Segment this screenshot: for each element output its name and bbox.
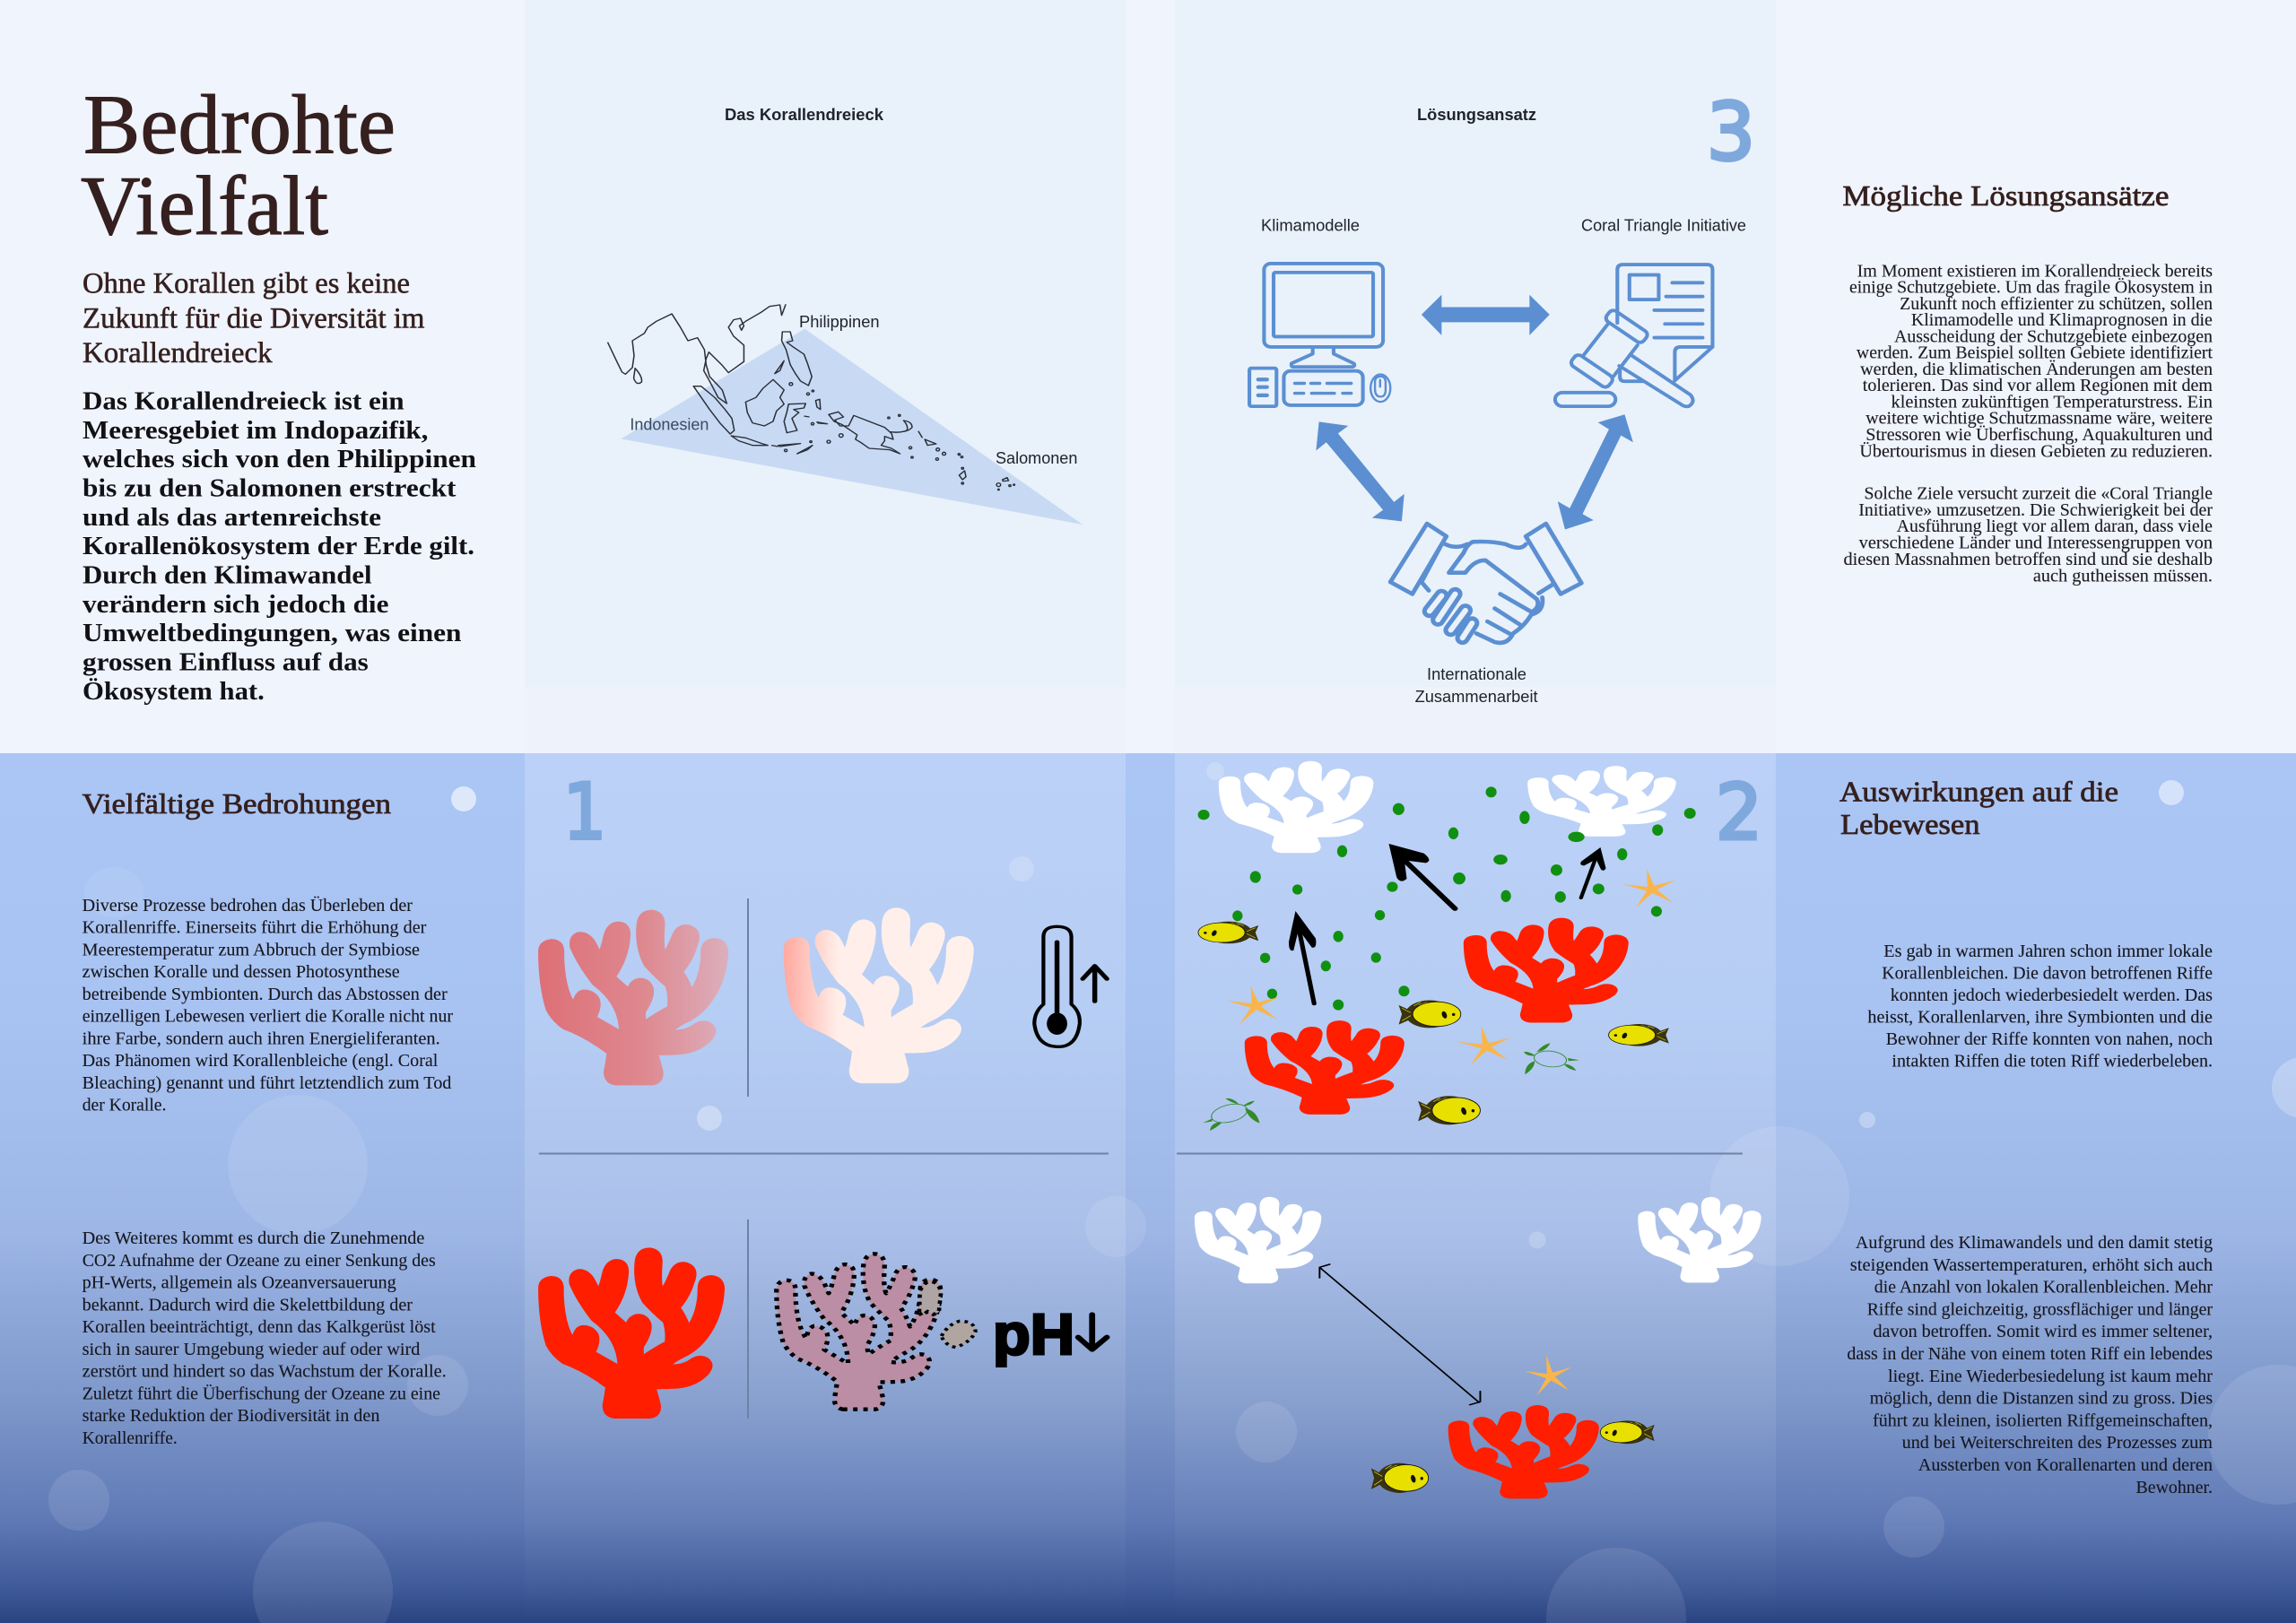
starfish [1525, 1355, 1572, 1396]
diagram: recolonisation with nearby reefs [1198, 762, 1696, 1131]
text: possible solutions: Klimamodelle und Klimaprognosen in die [1911, 311, 2213, 330]
text: threats: einzelligen Lebewesen verliert die Koralle nicht nur [83, 1007, 453, 1027]
label: pH: pH [993, 1302, 1074, 1367]
coral triangle map [608, 304, 1083, 525]
map labels: Indonesien [630, 414, 709, 433]
coral: bleached [786, 909, 971, 1081]
text: threats: Meerestemperatur zum Abbruch der Symbiose [83, 940, 420, 959]
text: threats: betreibende Symbionten. Durch das Abstossen der [83, 985, 448, 1004]
text: threats: pH-Werts, allgemein als Ozeanversauerung [83, 1273, 396, 1293]
turtle left [1203, 1098, 1260, 1131]
fish [1371, 1420, 1655, 1493]
panel: threats diagram background [525, 753, 1126, 1623]
coral: dissolved dotted [777, 1254, 941, 1410]
panel: map background [525, 0, 1126, 753]
arrow: upper coral to dead coral right [1580, 847, 1606, 898]
text: effects: die Anzahl von lokalen Korallenbleichen. Mehr [1874, 1278, 2213, 1298]
text: threats: ihre Farbe, sondern auch ihren Energieliferanten. [83, 1028, 440, 1048]
coral: dead white right [1639, 1198, 1760, 1281]
text: possible solutions: Ausführung liegt vor allem daran, dass viele [1897, 517, 2213, 536]
text: threats: CO2 Aufnahme der Ozeane zu einer Senkung des [83, 1251, 436, 1271]
panel: effects diagram background [1175, 753, 1776, 1623]
broken coral tip [919, 1281, 941, 1315]
coral: healthy faded [541, 912, 726, 1083]
coral: living red upper [1465, 919, 1626, 1021]
coral: living red lower [1247, 1021, 1402, 1114]
text: threats: zerstört und hindert so das Wachstum der Koralle. [83, 1362, 447, 1382]
diagram: ocean acidification [541, 1249, 1107, 1417]
map heading: Das Korallendreieck [725, 105, 884, 124]
title: Vielfalt [81, 160, 328, 253]
text: possible solutions: kleinsten zukünftigen Temperaturstress. Ein [1891, 393, 2213, 412]
text: threats: Diverse Prozesse bedrohen das Überleben der [83, 895, 413, 916]
text: threats: sich in saurer Umgebung wieder auf oder wird [83, 1340, 420, 1359]
text: possible solutions: werden, die klimatischen Änderungen am besten [1860, 360, 2213, 379]
heading: possible solutions: Mögliche Lösungsansätze [1842, 179, 2169, 212]
heading: effects: Lebewesen [1840, 808, 1980, 840]
coral: dead white left [1221, 762, 1371, 852]
text: effects: dass in der Nähe von einem toten Riff ein lebendes [1847, 1344, 2213, 1364]
arrow: lower coral to dead coral [1289, 911, 1316, 1003]
larvae dots [1198, 786, 1696, 1011]
intro text: bis zu den Salomonen erstreckt [83, 475, 457, 502]
text: possible solutions: Übertourismus in diesen Gebieten zu reduzieren. [1859, 442, 2213, 461]
solution diagram labels: Klimamodelle [1261, 216, 1360, 235]
text: threats: Korallenriffe. [83, 1428, 178, 1448]
title: Bedrohte [83, 79, 396, 172]
arrow: distance between reefs [1319, 1264, 1480, 1405]
text: threats: Korallenriffe. Einerseits führt die Erhöhung der [83, 918, 427, 938]
coral: living red [1450, 1406, 1597, 1497]
intro text: Das Korallendreieck ist ein [83, 387, 404, 416]
starfish [1226, 869, 1676, 1065]
subtitle: Zukunft für die Diversität im [83, 302, 425, 334]
text: effects: intakten Riffen die toten Riff wiederbeleben. [1892, 1051, 2213, 1071]
text: possible solutions: weitere wichtige Schutzmassname wäre, weitere [1866, 410, 2213, 429]
subtitle: Ohne Korallen gibt es keine [83, 268, 410, 300]
arrow: computer to handshake [1316, 421, 1405, 521]
text: effects: heisst, Korallenlarven, ihre Symbionten und die [1867, 1007, 2213, 1027]
triangle area [621, 329, 1083, 525]
solution heading: Lösungsansatz [1417, 105, 1536, 124]
text: possible solutions: einige Schutzgebiete. Um das fragile Ökosystem in [1849, 279, 2213, 298]
diagram: coral bleaching [541, 909, 1107, 1083]
coral: healthy red [541, 1249, 723, 1417]
text: threats: Bleaching) genannt und führt letztendlich zum Tod [83, 1073, 451, 1093]
text: effects: Korallenbleichen. Die davon betroffenen Riffe [1882, 963, 2213, 983]
coastlines [608, 304, 1014, 490]
heading: threats: Vielfältige Bedrohungen [83, 787, 391, 820]
intro text: Ökosystem hat. [83, 678, 265, 706]
text: possible solutions: verschiedene Länder und Interessengruppen von [1859, 534, 2213, 552]
text: possible solutions: Stressoren wie Überfischung, Aquakulturen und [1866, 426, 2213, 445]
icon: handshake [1390, 524, 1581, 643]
text: threats: bekannt. Dadurch wird die Skelettbildung der [83, 1295, 413, 1315]
arrow: pH falling [1078, 1315, 1107, 1350]
solution diagram labels: Coral Triangle Initiative [1581, 216, 1746, 235]
text: effects: Bewohner. [2136, 1478, 2213, 1497]
text: possible solutions: Initiative» umzusetzen. Die Schwierigkeit bei der [1858, 501, 2213, 520]
number 1: 1 [563, 768, 606, 857]
text: effects: und bei Weiterschreiten des Prozesses zum [1902, 1433, 2213, 1453]
text: effects: davon betroffen. Somit wird es immer seltener, [1873, 1322, 2213, 1341]
text: effects: konnten jedoch wiederbesiedelt werden. Das [1891, 985, 2213, 1005]
background: upper section [0, 0, 2296, 753]
title [81, 79, 396, 253]
text: threats: der Koralle. [83, 1096, 166, 1115]
text: possible solutions: auch gutheissen müssen. [2033, 567, 2213, 586]
icon: thermometer rising [1034, 926, 1107, 1046]
text: possible solutions: tolerieren. Das sind vor allem Regionen mit dem [1863, 377, 2213, 395]
text: threats: Korallen beeinträchtigt, denn das Kalkgerüst löst [83, 1317, 436, 1337]
intro text: verändern sich jedoch die [83, 591, 388, 619]
number 3: 3 [1707, 86, 1755, 178]
text: possible solutions: werden. Zum Beispiel sollten Gebiete identifiziert [1857, 344, 2213, 363]
text: effects: Aussterben von Korallenarten und deren [1918, 1455, 2213, 1475]
text: threats: Des Weiteres kommt es durch die Zunehmende [83, 1228, 425, 1248]
text: effects [1847, 942, 2213, 1497]
panel: solution background [1175, 0, 1776, 753]
text: threats: Zuletzt führt die Überfischung der Ozeane zu eine [83, 1383, 440, 1403]
text: effects: führt zu kleinen, isolierten Riffgemeinschaften, [1873, 1410, 2213, 1430]
intro text: und als das artenreichste [83, 504, 381, 532]
text: possible solutions [1844, 262, 2213, 586]
map labels: Salomonen [996, 448, 1077, 467]
heading: effects: Auswirkungen auf die [1839, 775, 2118, 807]
intro text: Durch den Klimawandel [83, 561, 372, 590]
text: possible solutions: Zukunft noch effizienter zu schützen, sollen [1900, 295, 2213, 314]
text: threats: starke Reduktion der Biodiversität in den [83, 1406, 379, 1426]
background: lower ocean gradient [0, 753, 2296, 1623]
text: effects: steigenden Wassertemperaturen, erhöht sich auch [1850, 1255, 2213, 1275]
text: possible solutions: Im Moment existieren im Korallendreieck bereits [1857, 262, 2213, 281]
map labels [630, 312, 1077, 467]
divider lines [539, 898, 1743, 1419]
text: possible solutions: Ausscheidung der Schutzgebiete einbezogen [1894, 327, 2213, 346]
text: effects: Riffe sind gleichzeitig, grossflächiger und länger [1867, 1299, 2213, 1319]
subtitle: Korallendreieck [83, 337, 273, 369]
intro text: welches sich von den Philippinen [83, 446, 476, 473]
text: effects: möglich, denn die Distanzen sind zu gross. Dies [1870, 1389, 2213, 1409]
arrow: document to handshake [1558, 414, 1633, 530]
text: effects: liegt. Eine Wiederbesiedelung ist kaum mehr [1888, 1367, 2213, 1386]
text: effects: Aufgrund des Klimawandels und den damit stetig [1856, 1233, 2213, 1253]
icon: computer [1249, 264, 1390, 406]
text: possible solutions: Solche Ziele versucht zurzeit die «Coral Triangle [1864, 485, 2213, 504]
text: effects: Bewohner der Riffe konnten von nahen, noch [1886, 1029, 2213, 1049]
coral: dead white right [1530, 767, 1674, 836]
text: possible solutions: diesen Massnahmen betroffen sind und sie deshalb [1844, 551, 2213, 569]
intro text: Meeresgebiet im Indopazifik, [83, 417, 428, 445]
intro text: Umweltbedingungen, was einen [83, 620, 462, 647]
text: threats: zwischen Koralle und dessen Photosynthese [83, 962, 400, 982]
intro text: Korallenökosystem der Erde gilt. [83, 533, 474, 560]
icon: document and gavel [1555, 265, 1712, 406]
number 2: 2 [1716, 768, 1762, 857]
heading: effects [1839, 775, 2118, 840]
text: effects: Es gab in warmen Jahren schon immer lokale [1883, 942, 2213, 961]
text: threats [83, 895, 453, 1448]
solution diagram labels: Zusammenarbeit [1415, 687, 1538, 706]
subtitle [83, 268, 425, 369]
arrow: computer to document [1422, 295, 1550, 335]
solution diagram [1249, 264, 1712, 643]
intro text [83, 387, 476, 706]
coral: dead white left [1196, 1198, 1319, 1282]
intro text: grossen Einfluss auf das [83, 649, 369, 676]
solution diagram labels: Internationale [1427, 664, 1526, 683]
broken fragment [942, 1321, 976, 1348]
solution diagram labels [1261, 216, 1746, 706]
turtle right [1524, 1043, 1579, 1074]
fish [1198, 922, 1669, 1124]
arrow: upper coral to dead coral [1389, 844, 1455, 908]
text: threats: Das Phänomen wird Korallenbleiche (engl. Coral [83, 1051, 439, 1071]
diagram: isolated reefs [1196, 1198, 1760, 1497]
decorative bubbles [48, 762, 2296, 1623]
map labels: Philippinen [799, 312, 880, 331]
